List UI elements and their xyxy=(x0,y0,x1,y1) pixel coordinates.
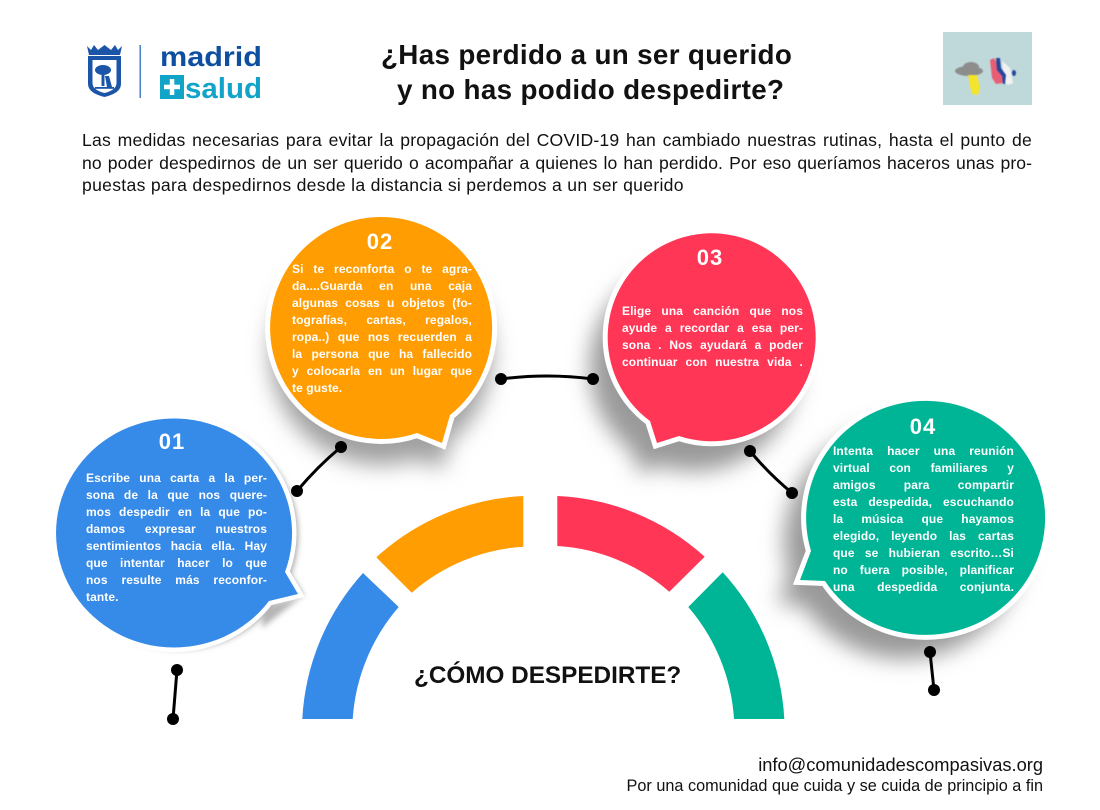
panel: step 03 xyxy=(576,233,816,485)
intro text: Las medidas necesarias para evitar la propagación del COVID-19 han cambiado nuestras rutinas, hasta el punto de xyxy=(82,130,1032,150)
connector: below 01 xyxy=(167,664,183,725)
connector: 02 to 03 xyxy=(495,373,599,385)
heading: como despedirte: ¿CÓMO DESPEDIRTE? xyxy=(414,662,681,689)
text: step 04: que se hubieran escrito…Si xyxy=(833,546,1014,560)
text: step 01: sentimientos hacia ella. Hay xyxy=(86,539,267,553)
title xyxy=(381,39,792,105)
footer: info@comunidadescompasivas.org xyxy=(758,754,1043,775)
footer xyxy=(627,754,1043,795)
text: step 03: Elige una canción que nos xyxy=(622,304,803,318)
text: step 02 xyxy=(292,262,472,395)
text: step 01: nos resulte más reconfor- xyxy=(86,573,267,587)
text: step 02: da....Guarda en una caja xyxy=(292,279,472,293)
intro text xyxy=(82,130,1032,195)
title: y no has podido despedirte? xyxy=(397,74,784,105)
arc segment: green xyxy=(688,572,784,719)
chart: semicircular four-segment arc xyxy=(302,496,784,719)
text: step 01: Escribe una carta a la per- xyxy=(86,471,267,485)
text: step 01: que intentar hacer lo que xyxy=(86,556,267,570)
text: step 04: no fuera posible, planificar xyxy=(833,563,1014,577)
text: step 01: tante. xyxy=(86,590,119,604)
text: step 03 xyxy=(622,304,803,369)
icon: coat of arms shield xyxy=(87,45,122,97)
text: step 02: ropa..) que nos recuerden a xyxy=(292,330,472,344)
panel: step 01 xyxy=(56,418,306,653)
logo: madrid salud xyxy=(87,43,262,101)
text: step 04: elegido, leyendo las cartas xyxy=(833,529,1014,543)
text: step 01: mos despedir en la que po- xyxy=(86,505,267,519)
text: step 04: una despedida conjunta. xyxy=(833,580,1014,594)
text: step 01 xyxy=(86,471,267,604)
intro text: no poder despedirnos de un ser querido o acompañar a quienes lo han perdido. Por eso queríamos haceros unas pro- xyxy=(82,152,1032,172)
text: step 02: te guste. xyxy=(292,381,342,395)
text: step 04: Intenta hacer una reunión xyxy=(833,444,1014,458)
text: step 03: continuar con nuestra vida . xyxy=(622,355,803,369)
text: step 02: Si te reconforta o te agra- xyxy=(292,262,472,276)
icon: illustration thumbnail xyxy=(943,32,1032,105)
connector: 03 to 04 xyxy=(744,445,798,499)
text: step 01: sona de la que nos quere- xyxy=(86,488,267,502)
text: step 04: esta despedida, escuchando xyxy=(833,495,1014,509)
intro text: puestas para despedirnos desde la distancia si perdemos a un ser querido xyxy=(82,175,684,195)
text: step 04: amigos para compartir xyxy=(833,478,1014,492)
arc segment: red xyxy=(557,496,705,592)
text: step 02: la persona que ha fallecido xyxy=(292,347,472,361)
text: step 04: virtual con familiares y xyxy=(833,461,1014,475)
panel: step 01: 01 xyxy=(159,429,185,454)
panel: step 02 xyxy=(256,217,506,478)
text: step 03: ayude a recordar a esa per- xyxy=(622,321,803,335)
text: step 02: algunas cosas u objetos (fo- xyxy=(292,296,472,310)
panel: step 03: 03 xyxy=(697,245,723,270)
text: step 04: la música que hayamos xyxy=(833,512,1014,526)
panel: step 04: 04 xyxy=(910,414,936,439)
title: ¿Has perdido a un ser querido xyxy=(381,39,792,70)
text: step 03: sona . Nos ayudará a poder xyxy=(622,338,803,352)
panel: step 04 xyxy=(768,400,1046,673)
text: step 02: y colocarla en un lugar que xyxy=(292,364,472,378)
connector: 01 to 02 xyxy=(291,441,347,497)
connector: below 04 xyxy=(924,646,940,696)
arc segment: orange xyxy=(376,496,523,593)
text: step 01: damos expresar nuestros xyxy=(86,522,267,536)
panel: step 02: 02 xyxy=(367,229,393,254)
arc segment: blue xyxy=(302,573,399,719)
footer: Por una comunidad que cuida y se cuida de principio a fin xyxy=(627,777,1043,795)
text: step 02: tografías, cartas, regalos, xyxy=(292,313,472,327)
text: step 04 xyxy=(833,444,1014,594)
